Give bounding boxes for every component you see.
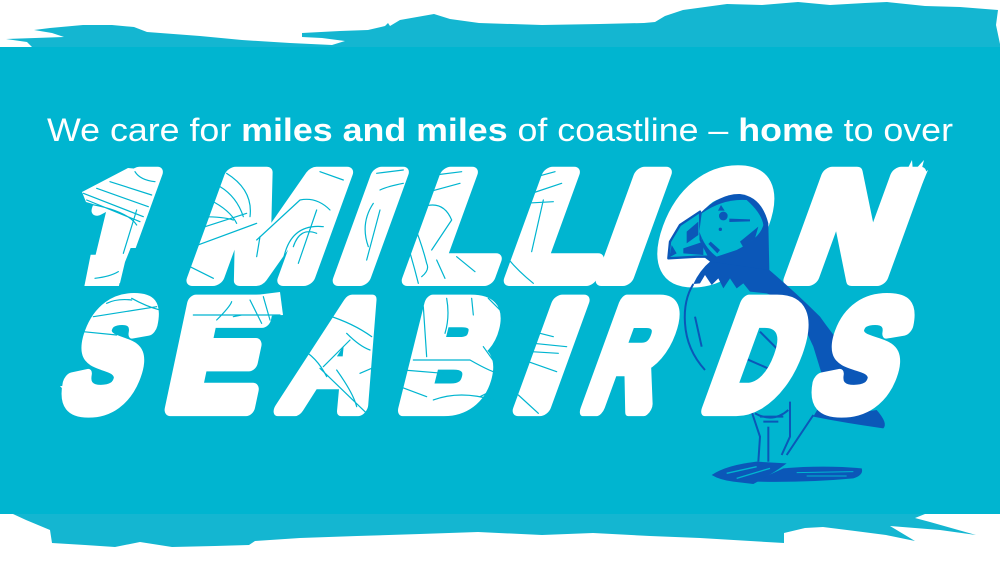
bottom brush stroke edge <box>13 514 976 547</box>
headline line 2: SEABIRDS: I <box>499 270 603 441</box>
headline line 1: 1 MILLION: M <box>173 142 367 310</box>
puffin tail <box>813 405 885 428</box>
puffin feet <box>712 462 787 484</box>
headline line 2: SEABIRDS: S <box>44 271 178 441</box>
puffin beak <box>668 212 709 258</box>
puffin eye and markings <box>708 205 758 253</box>
headline line 1: 1 MILLION: L <box>491 142 643 310</box>
puffin shadow <box>757 467 862 482</box>
contour lines on second half of lettering <box>480 172 567 413</box>
puffin body outline <box>685 284 705 370</box>
puffin legs <box>752 402 813 462</box>
headline line 2: SEABIRDS: E <box>156 270 282 440</box>
headline line 1: 1 MILLION: N <box>770 142 940 310</box>
headline line 2: SEABIRDS: S <box>794 271 934 441</box>
headline line 2: SEABIRDS: B <box>389 269 518 441</box>
headline line 1: 1 MILLION: 1 <box>52 143 193 311</box>
headline line 1: 1 MILLION: I <box>320 142 422 310</box>
headline line 2: SEABIRDS: D <box>688 269 832 441</box>
contour map lines on lettering <box>83 170 510 413</box>
puffin head cap <box>700 194 769 270</box>
headline line 1: 1 MILLION: O <box>634 143 798 311</box>
puffin face <box>699 200 763 257</box>
headline line 2: SEABIRDS: A <box>266 271 414 441</box>
intro sentence: We care for miles and miles of coastline – home to over <box>47 112 953 148</box>
puffin belly feather lines <box>695 317 783 400</box>
headline line 1: 1 MILLION: L <box>389 142 541 310</box>
headline line 2: SEABIRDS: R <box>567 271 699 441</box>
headline line 1: 1 MILLION <box>52 142 940 311</box>
puffin illustration <box>668 194 885 484</box>
headline line 1: 1 MILLION: I <box>583 142 685 310</box>
puffin beak facets <box>669 222 703 257</box>
headline line 2: SEABIRDS <box>44 269 934 441</box>
top brush stroke edge <box>6 2 1000 47</box>
puffin back and wing <box>693 247 873 390</box>
